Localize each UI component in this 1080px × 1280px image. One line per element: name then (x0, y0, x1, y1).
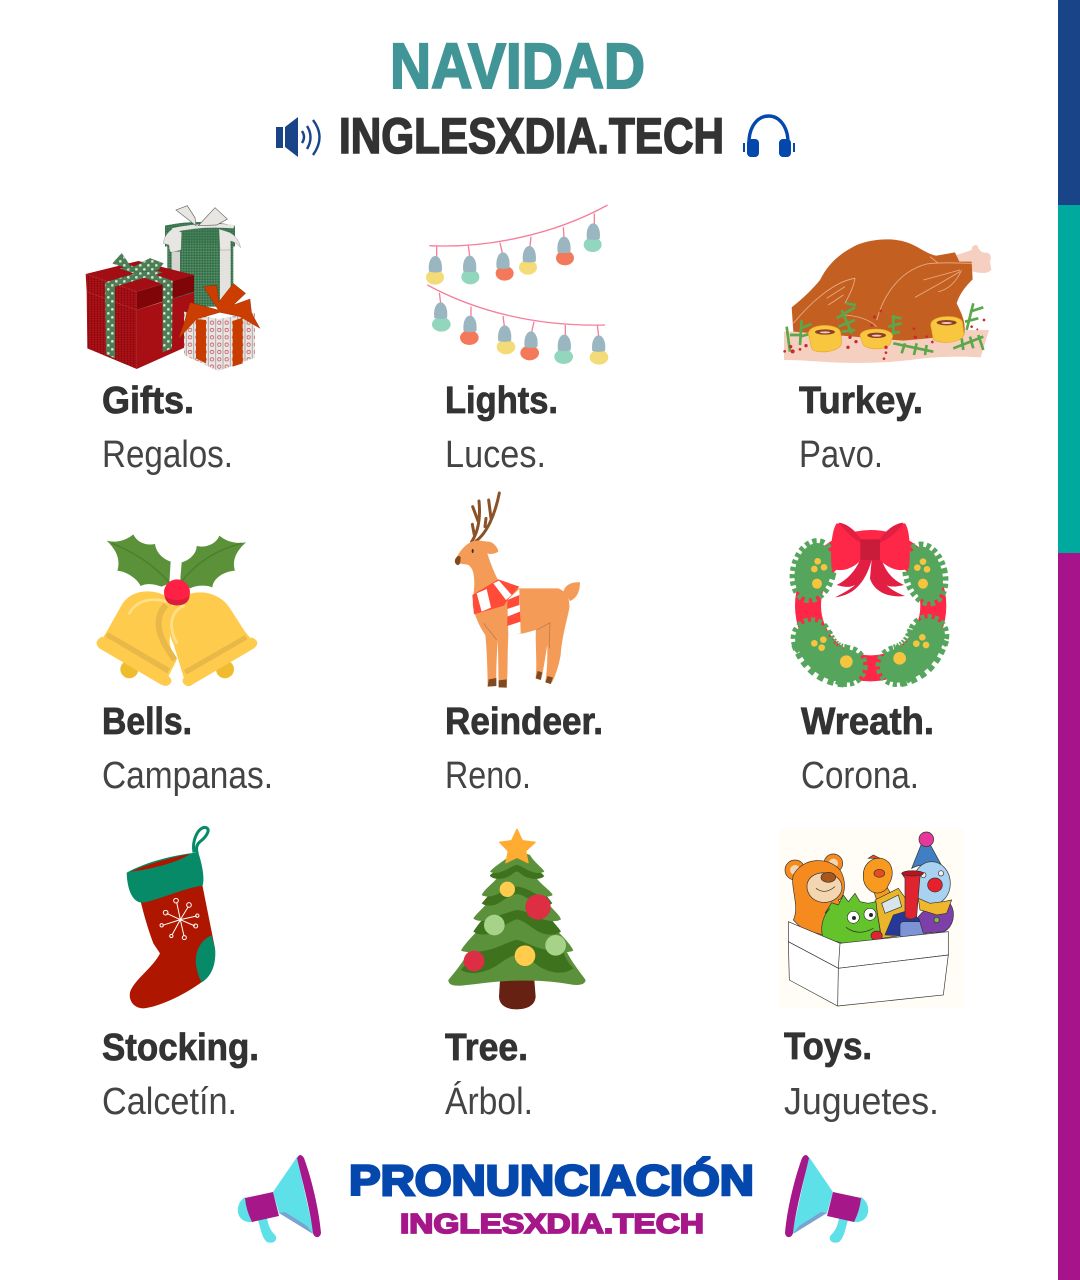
translation: Reno. (445, 755, 531, 797)
item: toys (778, 828, 963, 1123)
title: NAVIDAD (390, 30, 645, 102)
word: Bells. (102, 701, 192, 743)
item: gifts (86, 206, 260, 476)
word: Stocking. (102, 1027, 259, 1069)
item: bells (97, 534, 273, 797)
translation: Calcetín. (102, 1081, 237, 1123)
icon: bells with holly (97, 534, 257, 686)
subtitle row (276, 108, 795, 164)
item: turkey (783, 239, 991, 476)
icon: speaker (276, 117, 320, 157)
word: Toys. (784, 1026, 872, 1068)
translation: Juguetes. (784, 1081, 939, 1123)
icon: string lights (426, 205, 608, 365)
icon: wreath with bow (788, 523, 950, 684)
right colour bar (1058, 0, 1080, 1280)
footer site name: INGLESXDIA.TECH (400, 1208, 704, 1239)
icon: christmas stocking (127, 827, 215, 1008)
word: Turkey. (799, 380, 923, 422)
translation: Luces. (445, 434, 546, 476)
icon: headphones (743, 116, 795, 157)
item: stocking (102, 827, 259, 1123)
word: Tree. (445, 1027, 528, 1069)
icon: toy box (778, 828, 963, 1008)
translation: Regalos. (102, 434, 233, 476)
icon: left megaphone (238, 1155, 321, 1243)
word: Reindeer. (445, 701, 603, 743)
icon: roast turkey (783, 239, 991, 363)
translation: Árbol. (445, 1080, 533, 1123)
item: lights (426, 205, 608, 476)
icon: right megaphone (785, 1155, 868, 1243)
item: reindeer (445, 493, 603, 797)
word: Lights. (445, 380, 558, 422)
site name: INGLESXDIA.TECH (339, 108, 724, 164)
translation: Corona. (801, 755, 919, 797)
footer heading: PRONUNCIACIÓN (349, 1156, 754, 1205)
item: tree (445, 829, 586, 1123)
icon: gift boxes (86, 206, 260, 371)
item: wreath (788, 523, 950, 797)
word: Wreath. (801, 701, 934, 743)
translation: Campanas. (102, 755, 273, 797)
translation: Pavo. (799, 434, 883, 476)
word: Gifts. (102, 380, 194, 422)
icon: christmas tree (448, 829, 586, 1009)
icon: reindeer with scarf (455, 493, 580, 688)
